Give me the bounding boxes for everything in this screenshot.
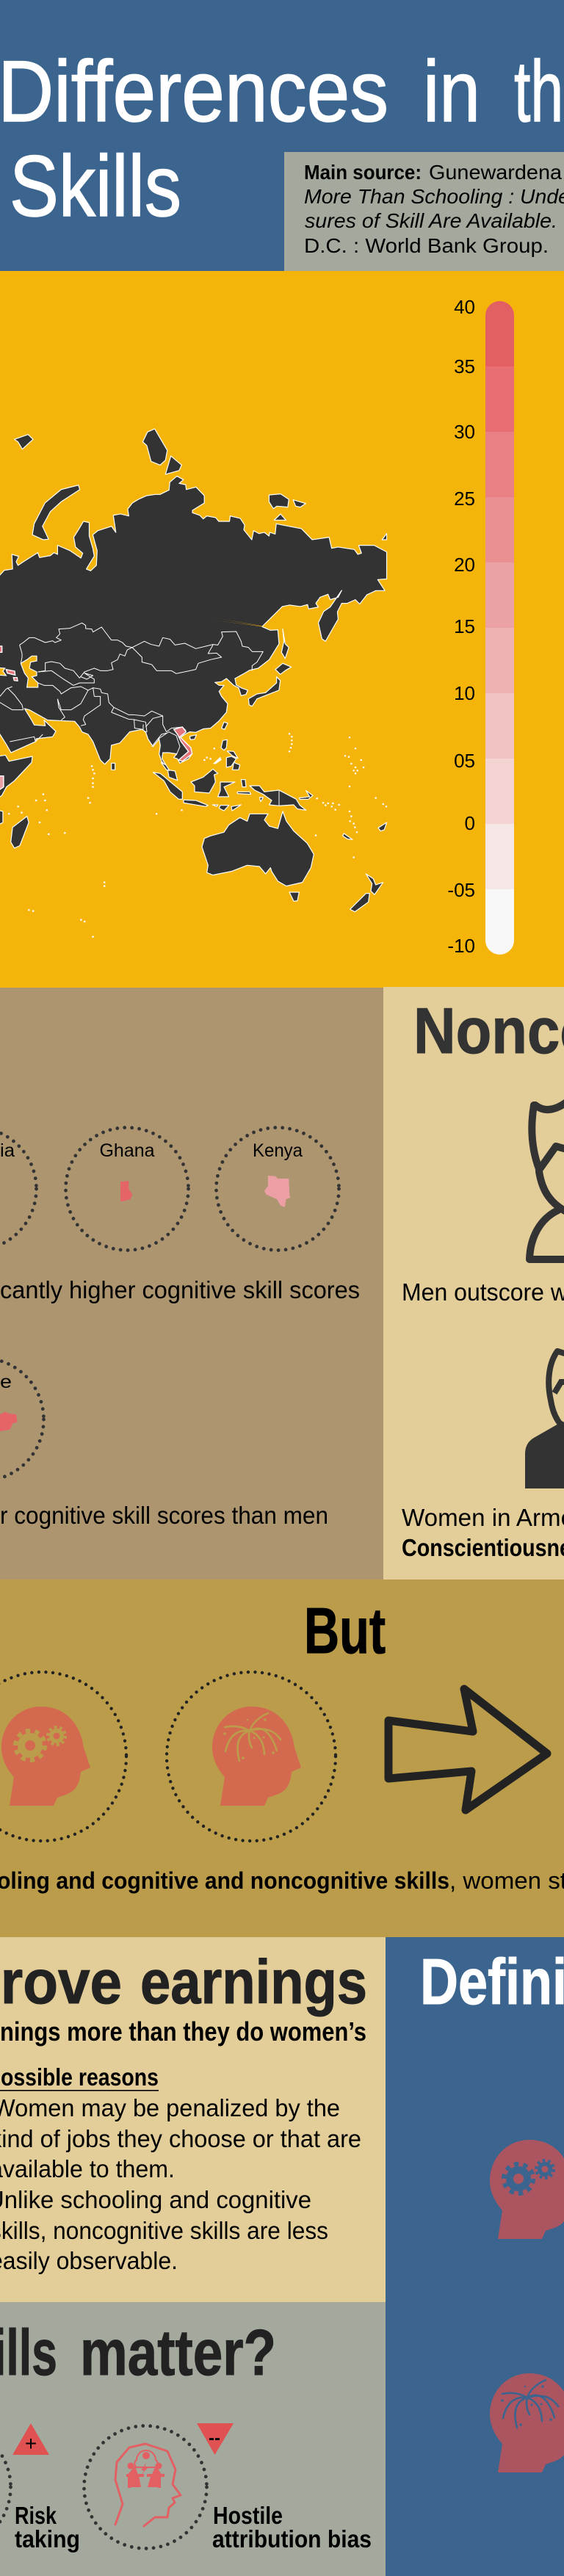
icon: minus triangle: --	[209, 2428, 220, 2448]
label: hostile attribution bias: Hostile	[213, 2502, 283, 2529]
text: women in Armenia	[402, 1504, 564, 1561]
label: risk taking: Risk	[15, 2502, 57, 2529]
text: lower scores than men: r cognitive skill scores than men	[0, 1502, 328, 1529]
panel: improve earnings	[0, 1937, 386, 2302]
panel: header	[0, 0, 564, 271]
text: women still: oling and cognitive and noncognitive skills	[0, 1867, 449, 1894]
icon: head with conflict	[84, 2426, 207, 2548]
circle: Ghana	[66, 1128, 188, 1250]
legend: scale labels	[447, 296, 475, 957]
title: in	[423, 43, 480, 140]
circle: country ia	[0, 1128, 37, 1250]
legend: scale labels: 05	[454, 750, 475, 772]
icon: pink head with gears	[490, 2140, 564, 2239]
source box: More Than Schooling : Unde	[304, 185, 564, 208]
legend: scale labels: 35	[454, 355, 475, 377]
icon: pink head with fireworks	[490, 2373, 564, 2472]
icon: man outline	[529, 1100, 564, 1259]
text: reasons list: Women may be penalized by the	[0, 2094, 340, 2121]
panel: definitions	[386, 1937, 564, 2576]
legend: scale labels: 30	[454, 421, 475, 443]
text: women higher scores: cantly higher cognitive skill scores	[0, 1276, 360, 1303]
panel: noncognitive skills	[383, 987, 564, 1580]
circle: country ne	[0, 1358, 44, 1480]
legend: scale labels: 40	[454, 296, 475, 318]
text: women still: , women st	[449, 1867, 564, 1894]
legend: scale labels: -05	[447, 879, 475, 901]
arrow	[388, 1689, 547, 1810]
label: risk taking: taking	[15, 2525, 80, 2553]
subheading: earnings: nings more than they do women’s	[0, 2016, 366, 2047]
legend: scale labels: 15	[454, 615, 475, 637]
label: hostile attribution bias: attribution bias	[212, 2525, 372, 2553]
source box: sures of Skill Are Available.	[305, 209, 557, 232]
circle: country ia: ia	[0, 1140, 15, 1161]
map: Asia and Oceania	[0, 429, 387, 937]
legend: scale labels: 10	[454, 682, 475, 704]
legend: colour scale bar	[485, 301, 514, 955]
title: Skills	[10, 138, 181, 235]
heading: improve earnings: earnings	[140, 1947, 367, 2016]
circle: country ne: e	[0, 1372, 12, 1392]
icon: plus triangle	[12, 2423, 49, 2455]
heading: skills matter	[0, 2316, 276, 2389]
legend: scale labels: 0	[465, 812, 475, 834]
title: Differences	[0, 43, 388, 140]
panel: but	[0, 1580, 564, 1937]
text: reasons list	[0, 2094, 361, 2274]
legend: scale labels: 20	[454, 554, 475, 576]
circle: Kenya	[216, 1128, 339, 1250]
text: reasons list: kind of jobs they choose or that are	[0, 2125, 361, 2152]
panel: cognitive skills	[0, 988, 383, 1580]
icon: head with gears	[0, 1672, 126, 1841]
icon: head with fireworks	[167, 1672, 336, 1841]
icon: minus triangle	[197, 2423, 234, 2455]
icon: woman silhouette	[525, 1351, 564, 1488]
title	[0, 43, 564, 235]
source box: D.C. : World Bank Group.	[304, 234, 549, 257]
text: reasons list: skills, noncognitive skills are less	[0, 2217, 328, 2244]
legend: scale labels: 25	[454, 488, 475, 510]
icon: plus triangle: +	[25, 2432, 37, 2455]
heading: but: But	[304, 1594, 386, 1667]
source box	[284, 152, 564, 271]
panel: why skills matter	[0, 2302, 386, 2576]
heading: skills matter: matter?	[80, 2316, 276, 2389]
legend: scale labels: -10	[447, 935, 475, 957]
circle: Ghana: Ghana	[100, 1140, 155, 1161]
heading: improve earnings	[0, 1947, 367, 2016]
source box: Gunewardena	[429, 161, 562, 184]
label: hostile attribution bias	[212, 2502, 372, 2553]
circle: Kenya: Kenya	[253, 1140, 303, 1161]
circle: risk taking edge	[0, 2426, 10, 2548]
panel: world map section	[0, 271, 564, 988]
source box: Main source:	[304, 161, 422, 184]
label: risk taking	[15, 2502, 80, 2553]
